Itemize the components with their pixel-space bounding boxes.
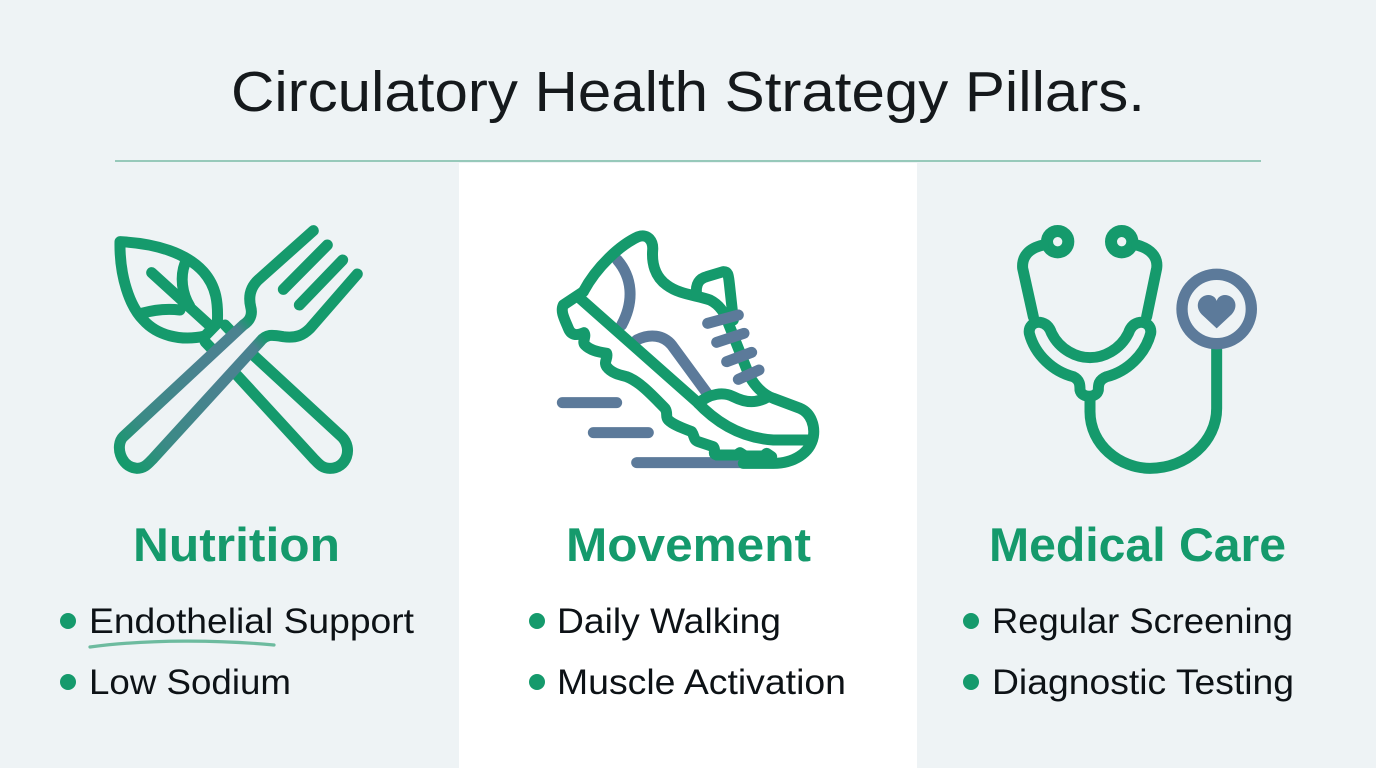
icon: leaf and fork xyxy=(119,231,357,468)
icon: running shoe xyxy=(562,236,814,463)
list: medical care items: Diagnostic Testing xyxy=(992,663,1294,702)
list: nutrition items: Endothelial Support xyxy=(89,602,414,641)
heading: Medical Care: Medical Care xyxy=(989,518,1286,571)
panel: nutrition xyxy=(60,231,414,702)
list: movement items xyxy=(529,602,846,702)
icon: stethoscope with heart xyxy=(1023,231,1251,468)
panel: medical care xyxy=(963,231,1294,702)
list: medical care items: Regular Screening xyxy=(992,602,1293,641)
list: movement items: Daily Walking xyxy=(557,602,781,641)
heading: Movement: Movement xyxy=(566,518,811,571)
list: movement items: Muscle Activation xyxy=(557,663,846,702)
panel: centre column background xyxy=(459,163,917,768)
list: medical care items xyxy=(963,602,1294,702)
list: nutrition items xyxy=(60,602,414,702)
panel: movement xyxy=(529,236,846,702)
heading: Nutrition: Nutrition xyxy=(133,518,340,571)
list: nutrition items: Low Sodium xyxy=(89,663,291,702)
title: Circulatory Health Strategy Pillars. xyxy=(231,60,1145,124)
